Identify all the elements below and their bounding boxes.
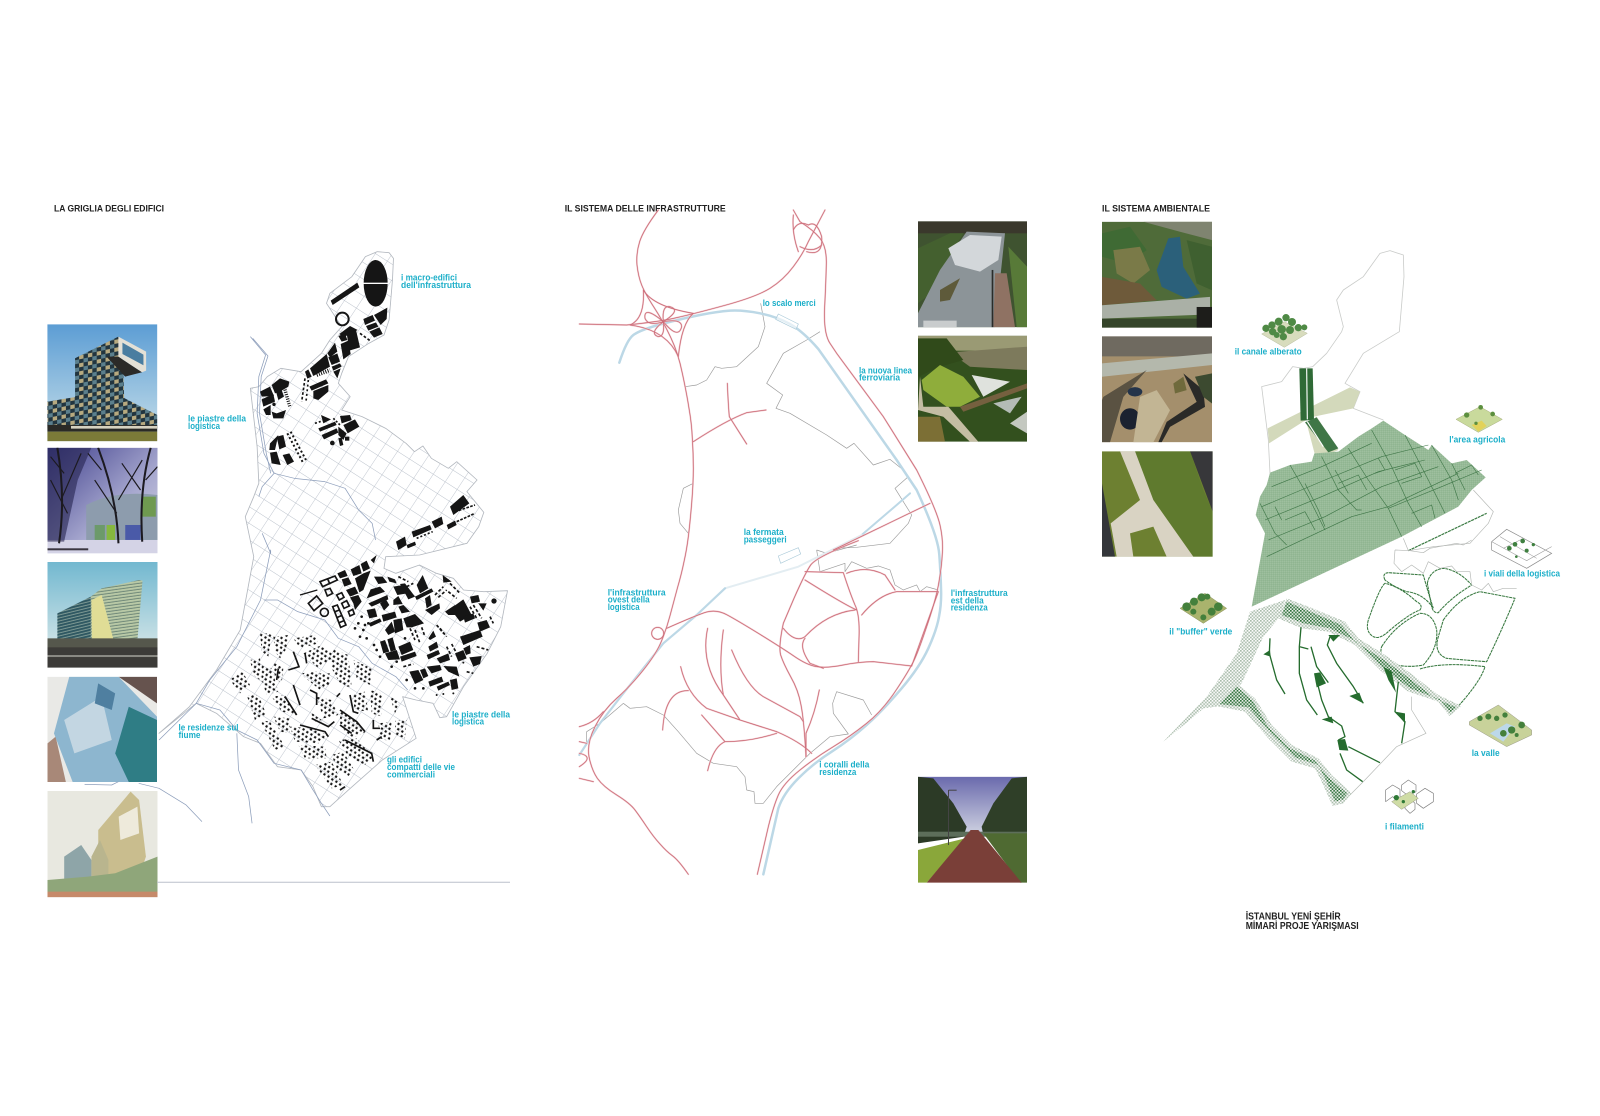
- label: ferroviaria: ferroviaria: [859, 373, 901, 384]
- panel: il sistema ambientale: [1102, 204, 1561, 832]
- district boundaries: [587, 303, 938, 803]
- label: logistica west: logistica: [608, 602, 640, 613]
- label: l'area agricola: l'area agricola: [1449, 434, 1506, 445]
- canal trees: [1299, 368, 1314, 421]
- photo: park with ponds: [1102, 336, 1212, 442]
- roads: [579, 210, 943, 874]
- station boxes: [776, 314, 801, 563]
- logistics buildings: [300, 555, 497, 696]
- icon: l'area agricola: [1456, 405, 1502, 432]
- photo: canal aerial: [1102, 222, 1212, 328]
- map: environmental system: [1262, 251, 1404, 473]
- north buildings: [260, 260, 475, 550]
- photo: park with bridge: [918, 336, 1027, 442]
- label: l'infrastruttura west: l'infrastruttura: [608, 587, 666, 598]
- label: i viali della logistica: i viali della logistica: [1484, 569, 1561, 580]
- label: i macro-edifici: i macro-edifici: [401, 273, 457, 284]
- hollow macro blocks: [300, 576, 354, 627]
- buffer light: [1163, 600, 1285, 742]
- label: le piastre della east: le piastre della: [452, 709, 511, 720]
- photo: curved building among trees: [48, 448, 158, 554]
- label: il buffer verde: il "buffer" verde: [1169, 627, 1232, 638]
- icon: il buffer verde: [1180, 593, 1227, 623]
- panel: il sistema delle infrastrutture: [565, 204, 1027, 883]
- label: i coralli della: i coralli della: [819, 760, 870, 771]
- buffer dark south: [1219, 687, 1347, 802]
- title: il sistema ambientale: IL SISTEMA AMBIENTALE: [1102, 204, 1210, 214]
- footer: competition title: [1246, 909, 1359, 932]
- urban grid outline: [159, 252, 507, 807]
- top outline: [1262, 251, 1404, 473]
- label: ovest della: ovest della: [608, 595, 650, 606]
- icon: la valle: [1469, 705, 1532, 747]
- label: fiume: fiume: [178, 730, 200, 741]
- label: commerciali: commerciali: [387, 769, 435, 780]
- label: logistica: logistica: [188, 421, 221, 432]
- map: urban grid and rivers: [85, 252, 507, 823]
- rivers: [85, 337, 408, 823]
- residential buildings: [230, 633, 407, 790]
- photo: elevated walkway: [1102, 451, 1213, 557]
- panel: la griglia degli edifici: [47, 204, 511, 897]
- title: il sistema delle infrastrutture: IL SISTEMA DELLE INFRASTRUTTURE: [565, 204, 726, 214]
- buffer halo north: [1278, 598, 1462, 716]
- icon: il canale alberato: [1262, 314, 1307, 347]
- label: residenza east: residenza: [951, 603, 988, 614]
- macro-building oval: [364, 260, 388, 307]
- label: la fermata: la fermata: [744, 527, 784, 538]
- roads halo: [579, 210, 943, 874]
- label: compatti delle vie: compatti delle vie: [387, 762, 455, 773]
- label: residenza coral: residenza: [819, 767, 857, 778]
- logistics avenues: [1367, 513, 1515, 713]
- photo: checkered tower: [47, 324, 158, 442]
- label: lo scalo merci: lo scalo merci: [763, 298, 816, 309]
- photo: glass facade: [48, 676, 157, 782]
- label: le residenze sul: le residenze sul: [178, 723, 238, 734]
- beige canal base: [1307, 417, 1338, 457]
- green field: [1252, 421, 1486, 607]
- valley filaments: [1263, 627, 1405, 782]
- photo: office slab at dusk: [48, 562, 158, 668]
- title: la griglia degli edifici: LA GRIGLIA DEGLI EDIFICI: [54, 204, 164, 214]
- icon: i viali della logistica: [1492, 529, 1552, 568]
- label: passeggeri: passeggeri: [744, 534, 787, 545]
- label: il canale alberato: il canale alberato: [1235, 347, 1302, 358]
- label: l'infrastruttura east: l'infrastruttura: [951, 588, 1008, 599]
- label: le piastre della: le piastre della: [188, 414, 247, 425]
- field subdivisions: [1260, 430, 1482, 557]
- label: i filamenti: i filamenti: [1385, 821, 1424, 832]
- label: dell'infrastruttura: dell'infrastruttura: [401, 280, 472, 291]
- photo: residential green building: [48, 791, 158, 898]
- photo: plaza from above: [918, 221, 1027, 328]
- buffer halo south: [1216, 683, 1352, 806]
- photo: tree-lined red path: [918, 776, 1027, 883]
- footer line 1: İSTANBUL YENİ ŞEHİR: [1246, 909, 1341, 922]
- footer line 2: MİMARİ PROJE YARIŞMASI: [1246, 919, 1359, 932]
- icon: i filamenti: [1386, 780, 1433, 813]
- buffer dark north: [1282, 602, 1457, 713]
- label: logistica east: logistica: [452, 717, 485, 728]
- label: la nuova linea: la nuova linea: [859, 365, 913, 376]
- agricultural band: [1268, 387, 1360, 443]
- district outlines: [1350, 490, 1517, 795]
- label: la valle: la valle: [1472, 748, 1500, 759]
- label: est della: est della: [951, 595, 984, 606]
- railway line: [579, 311, 941, 874]
- base line: [157, 881, 510, 883]
- map: infrastructure network: [579, 210, 943, 874]
- label: gli edifici: gli edifici: [387, 755, 422, 766]
